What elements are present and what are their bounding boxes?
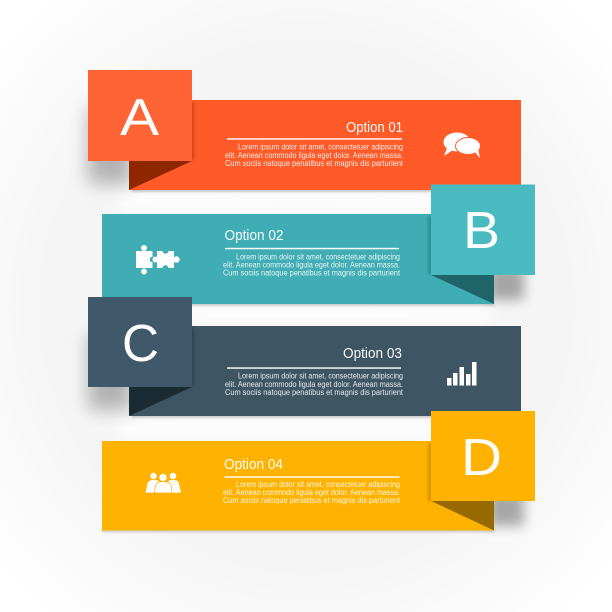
square C [88, 297, 192, 387]
icon: bar chart [447, 362, 476, 386]
body text D: Cum sociis natoque penatibus et magnis dis parturient [223, 496, 401, 505]
body text D: Lorem ipsum dolor sit amet, consectetuer adipiscing [236, 480, 400, 489]
ribbon D [102, 441, 494, 530]
letter B: B [463, 202, 500, 260]
heading D: Option 04 [224, 457, 283, 473]
square B [431, 184, 535, 275]
body text A: Cum sociis natoque penatibus et magnis dis parturient [225, 159, 404, 168]
body text D: elit. Aenean commodo ligula eget dolor. Aenean massa. [223, 488, 400, 497]
panel: option C [88, 297, 522, 418]
heading B: Option 02 [224, 228, 284, 244]
letter D: D [461, 429, 502, 487]
icon: group of people [145, 472, 182, 493]
body text C: Cum sociis natoque penatibus et magnis dis parturient [225, 388, 404, 397]
body text B: Lorem ipsum dolor sit amet, consectetuer adipiscing [236, 252, 400, 262]
body text B [223, 252, 401, 277]
ribbon B [102, 214, 494, 304]
fold A [129, 161, 192, 190]
icon: speech bubbles [444, 132, 480, 158]
letter A: A [120, 89, 159, 147]
panel: option B [102, 184, 535, 306]
ribbon C [129, 326, 521, 416]
icon: puzzle pieces [136, 245, 180, 274]
body text A: Lorem ipsum dolor sit amet, consectetuer adipiscing [238, 142, 403, 152]
fold B [431, 275, 494, 304]
body text A [225, 142, 404, 168]
body text C: Lorem ipsum dolor sit amet, consectetuer adipiscing [238, 372, 403, 380]
body text A: elit. Aenean commodo ligula eget dolor. Aenean massa. [225, 151, 403, 160]
body text D [223, 480, 401, 505]
body text B: elit. Aenean commodo ligula eget dolor. Aenean massa. [223, 260, 400, 269]
ribbon A [129, 100, 521, 190]
panel: option A [88, 70, 522, 192]
heading A: Option 01 [346, 120, 403, 136]
body text B: Cum sociis natoque penatibus et magnis dis parturient [223, 268, 401, 277]
panel: option D [102, 411, 535, 532]
body text C [225, 372, 404, 397]
letter C: C [122, 315, 159, 373]
square A [88, 70, 192, 161]
fold D [431, 501, 494, 530]
body text C: elit. Aenean commodo ligula eget dolor. Aenean massa. [225, 380, 403, 389]
heading C: Option 03 [343, 346, 402, 362]
square D [431, 411, 535, 501]
fold C [129, 387, 192, 416]
